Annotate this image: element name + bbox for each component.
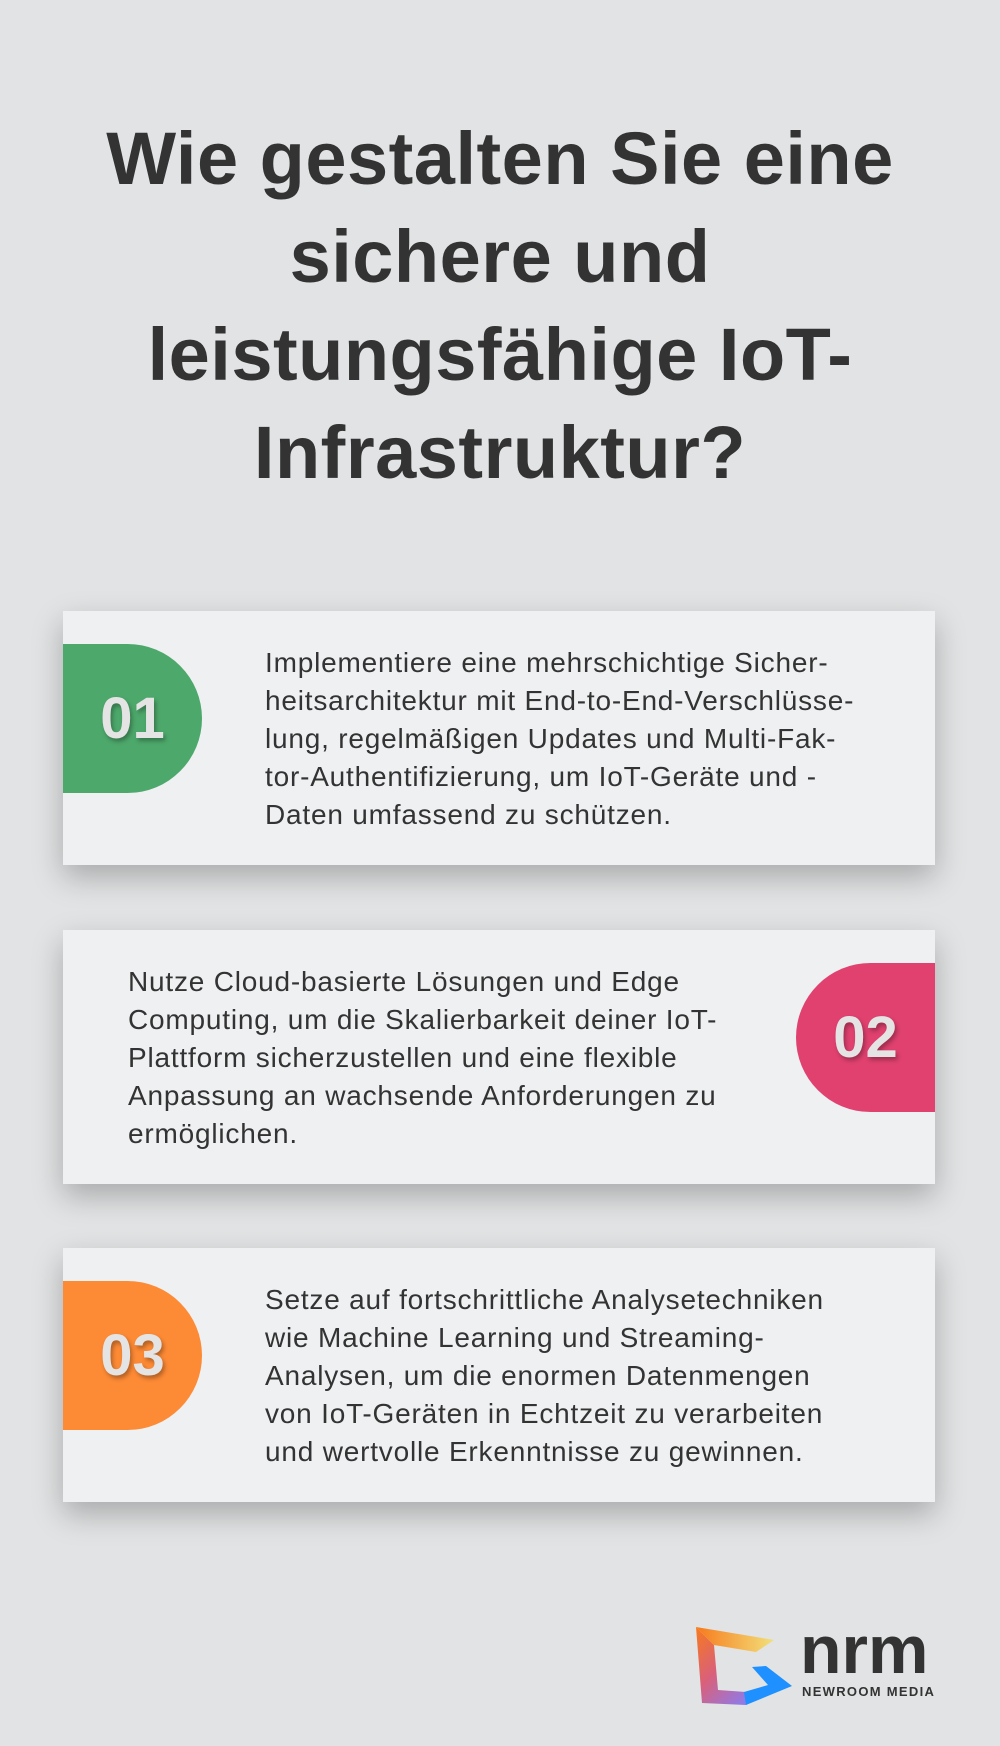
title: Infrastruktur?: [254, 411, 746, 494]
badge 01: 01: [100, 686, 165, 751]
text 2: Anpassung an wachsende Anforderungen zu: [128, 1080, 717, 1111]
text 3: wie Machine Learning und Streaming-: [265, 1322, 765, 1353]
icon: logo mark: [696, 1627, 792, 1705]
badge 01: [63, 644, 202, 793]
text 3: und wertvolle Erkenntnisse zu gewinnen.: [265, 1436, 804, 1467]
title: leistungsfähige IoT-: [148, 313, 852, 396]
text 2: ermöglichen.: [128, 1118, 298, 1149]
wordmark: nrm: [800, 1612, 928, 1688]
text 1: [265, 647, 854, 830]
badge 03: 03: [100, 1323, 165, 1388]
text 2: [128, 966, 717, 1149]
logo: NEWROOM MEDIA: [802, 1684, 935, 1699]
text 1: lung, regelmäßigen Updates und Multi-Fak-: [265, 723, 836, 754]
text 1: Daten umfassend zu schützen.: [265, 799, 672, 830]
badge 02: 02: [833, 1005, 898, 1070]
panel: step 1: [63, 611, 935, 865]
badge 02: [796, 963, 935, 1112]
title: Wie gestalten Sie eine: [106, 117, 894, 200]
text 2: Computing, um die Skalierbarkeit deiner IoT-: [128, 1004, 717, 1035]
text 1: heitsarchitektur mit End-to-End-Verschlüsse-: [265, 685, 854, 716]
panel: step 2: [63, 930, 935, 1184]
text 2: Plattform sicherzustellen und eine flexible: [128, 1042, 678, 1073]
text 3: von IoT-Geräten in Echtzeit zu verarbeiten: [265, 1398, 823, 1429]
badge 03: [63, 1281, 202, 1430]
text 3: [265, 1284, 824, 1467]
panel: step 3: [63, 1248, 935, 1502]
logo: [696, 1612, 935, 1705]
text 3: Analysen, um die enormen Datenmengen: [265, 1360, 811, 1391]
text 2: Nutze Cloud-basierte Lösungen und Edge: [128, 966, 680, 997]
text 1: Implementiere eine mehrschichtige Sicher-: [265, 647, 828, 678]
title: [106, 117, 894, 494]
text 1: tor-Authentifizierung, um IoT-Geräte und -: [265, 761, 817, 792]
title: sichere und: [290, 215, 710, 298]
text 3: Setze auf fortschrittliche Analysetechniken: [265, 1284, 824, 1315]
